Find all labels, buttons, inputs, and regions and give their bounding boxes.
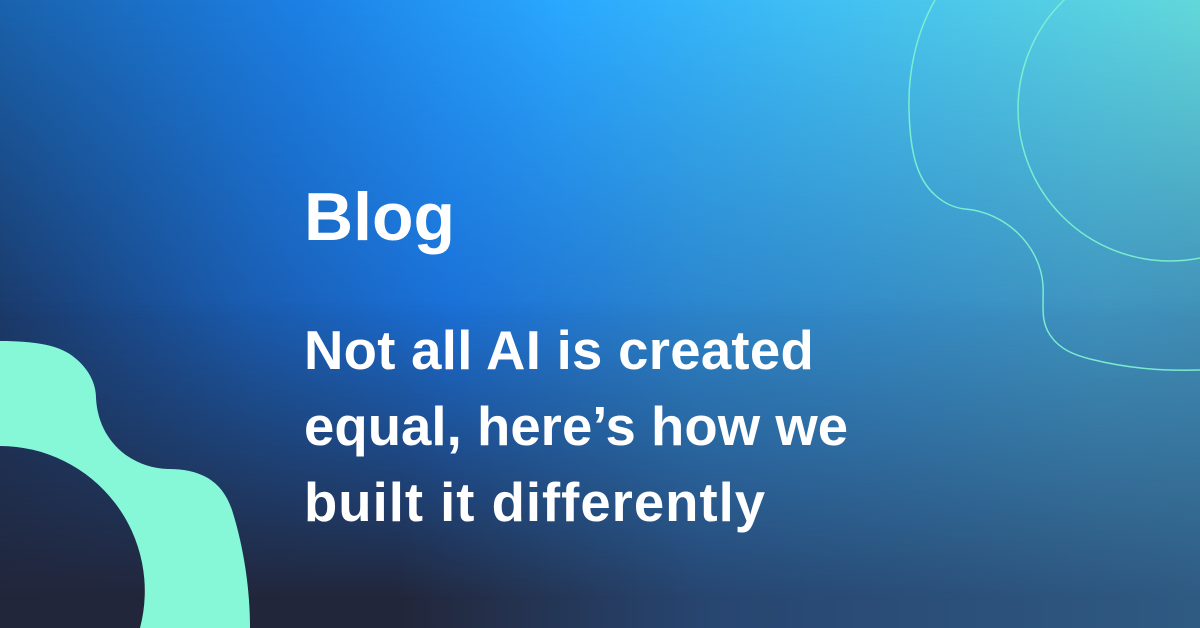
blog post title (304, 320, 848, 533)
blog post title: built it differently (304, 472, 766, 533)
blog post title: Not all AI is created (304, 320, 814, 381)
icon: green gear shape bottom left (0, 341, 250, 628)
heading: Blog: Blog (304, 179, 455, 255)
icon: outlined gear shape top right (909, 0, 1200, 370)
blog post title: equal, here’s how we (304, 396, 848, 457)
